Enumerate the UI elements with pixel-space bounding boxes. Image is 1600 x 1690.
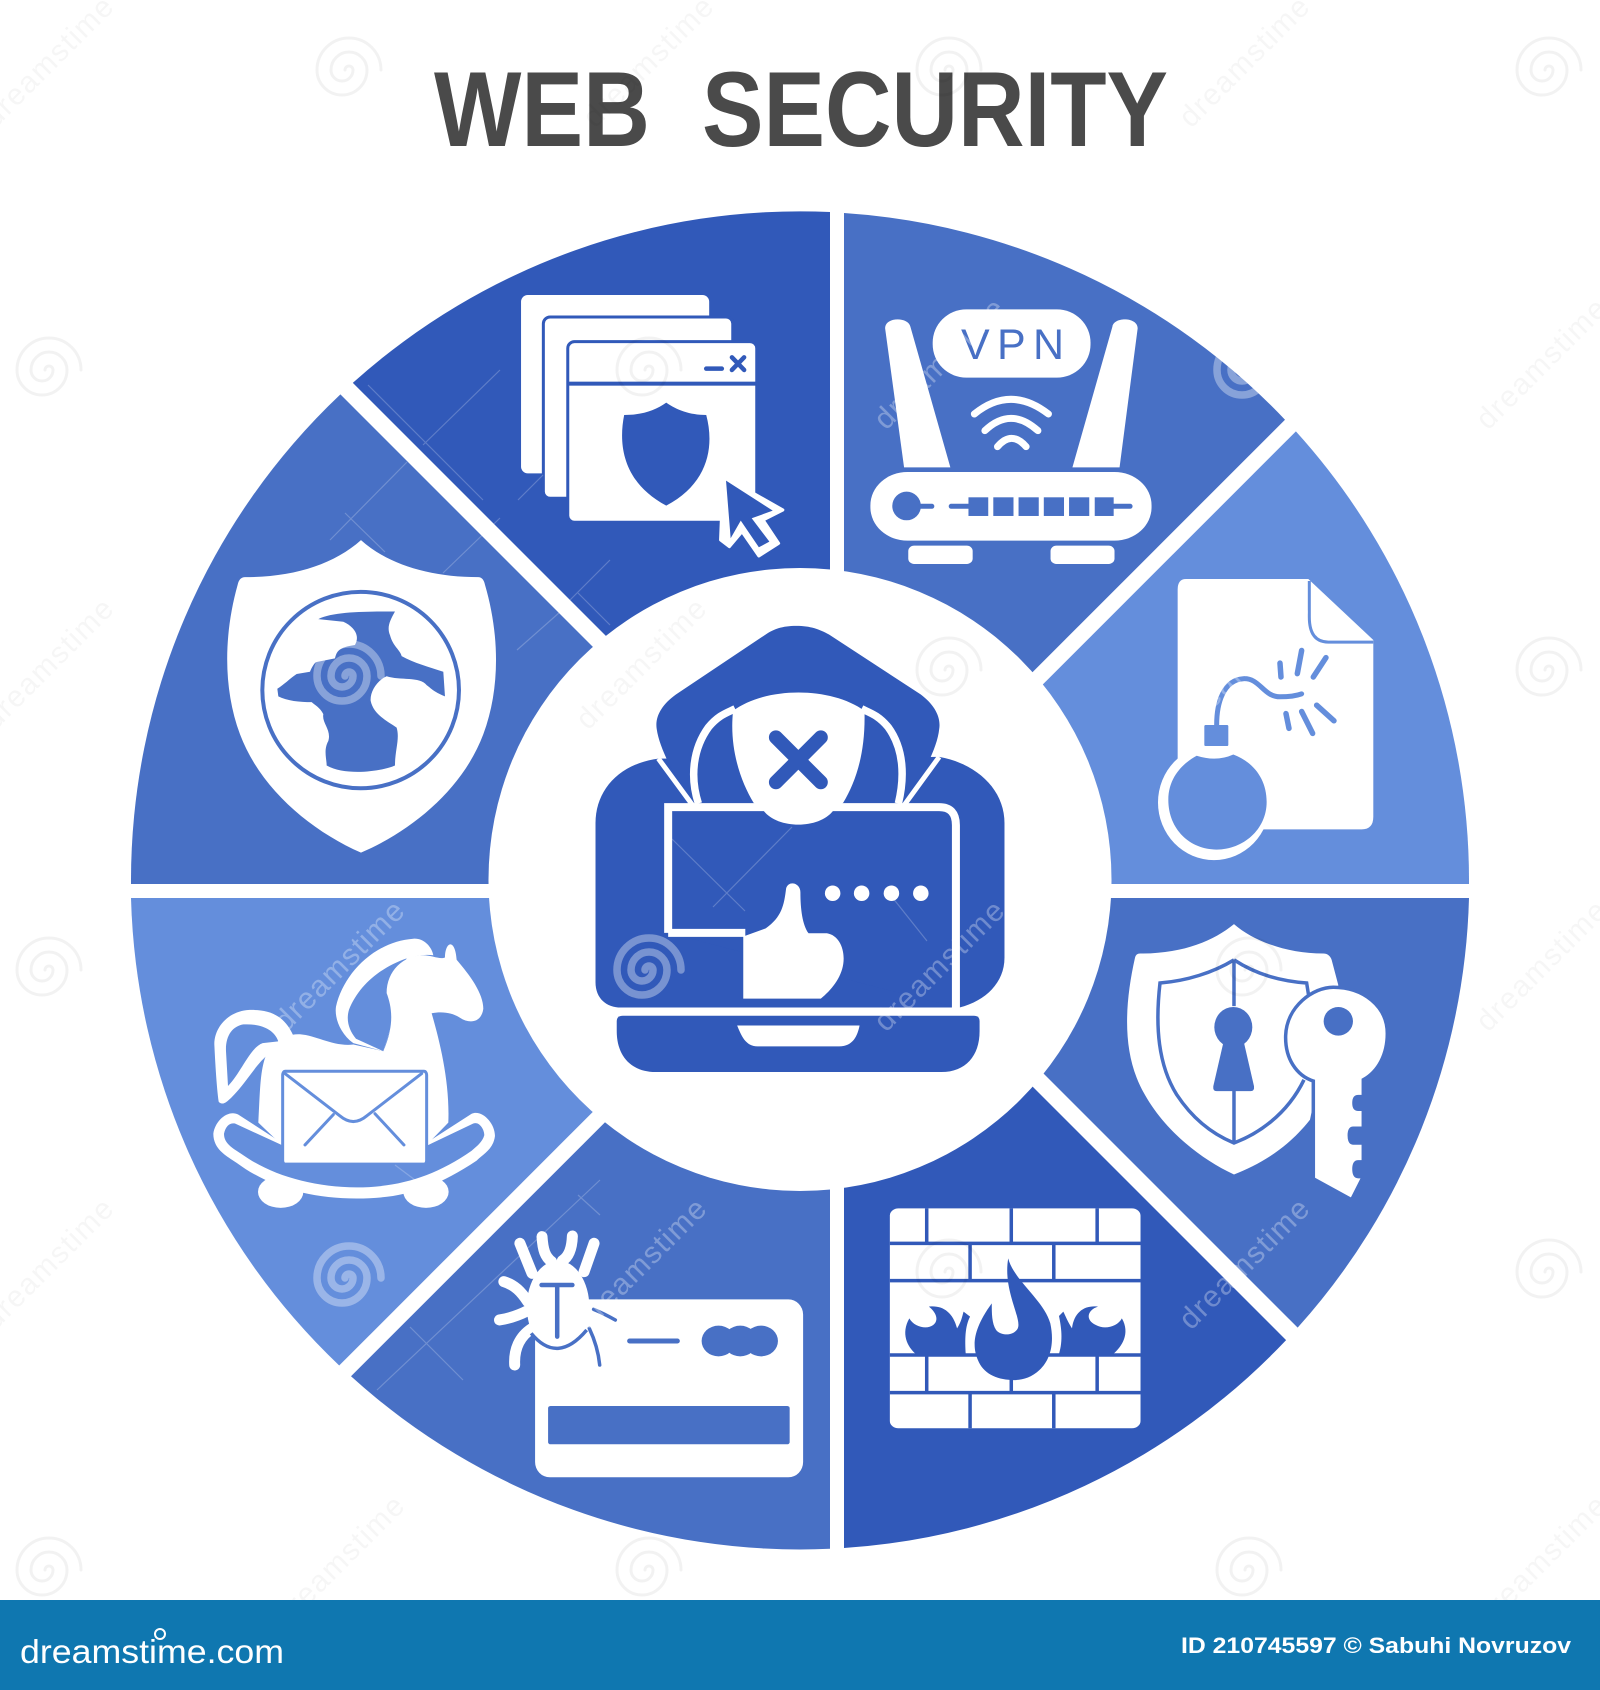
watermark text: dreamstime (268, 1489, 411, 1633)
watermark lattice lines (330, 370, 927, 1390)
watermark text: dreamstime (570, 592, 713, 736)
panel: shield and key (868, 898, 1469, 1328)
watermark text: dreamstime (268, 894, 411, 1038)
icon: bug on credit card (500, 1236, 803, 1477)
VPN label: VPN (961, 321, 1064, 369)
icon: browser windows with shield and cursor (521, 295, 783, 556)
panel: trojan horse email (131, 898, 807, 1366)
watermark text: dreamstime (868, 292, 1011, 436)
panel: secure browser window (353, 211, 830, 860)
icon: VPN router (870, 309, 1152, 564)
center circle (488, 568, 1112, 1191)
watermark text: dreamstime (868, 894, 1011, 1038)
watermark text: dreamstime (1173, 1192, 1316, 1336)
icon: rocking horse with envelope (213, 939, 495, 1208)
panel: card skimmer (351, 897, 830, 1549)
watermark text: dreamstime (570, 1192, 713, 1336)
watermark text: dreamstime (1173, 592, 1316, 736)
title: WEB (434, 49, 650, 169)
panel: file bomb (843, 431, 1469, 884)
footer logo: dreamstime.com (20, 1633, 284, 1670)
icon: shield with globe (227, 540, 496, 853)
panel: protected globe (131, 394, 830, 884)
panel: firewall (844, 898, 1286, 1548)
footer credit: ID 210745597 © Sabuhi Novruzov (1181, 1633, 1572, 1658)
icon: shield with keyhole and key (1127, 924, 1387, 1200)
icon: hacker behind laptop (596, 626, 1004, 1072)
title (434, 49, 1168, 169)
title: SECURITY (702, 49, 1168, 169)
icon: brick wall with flames (890, 1208, 1141, 1428)
footer bar (0, 1600, 1600, 1690)
watermark text: dreamstime (268, 292, 411, 436)
icon: document with bomb (1158, 579, 1373, 860)
panel: VPN router (844, 213, 1285, 861)
